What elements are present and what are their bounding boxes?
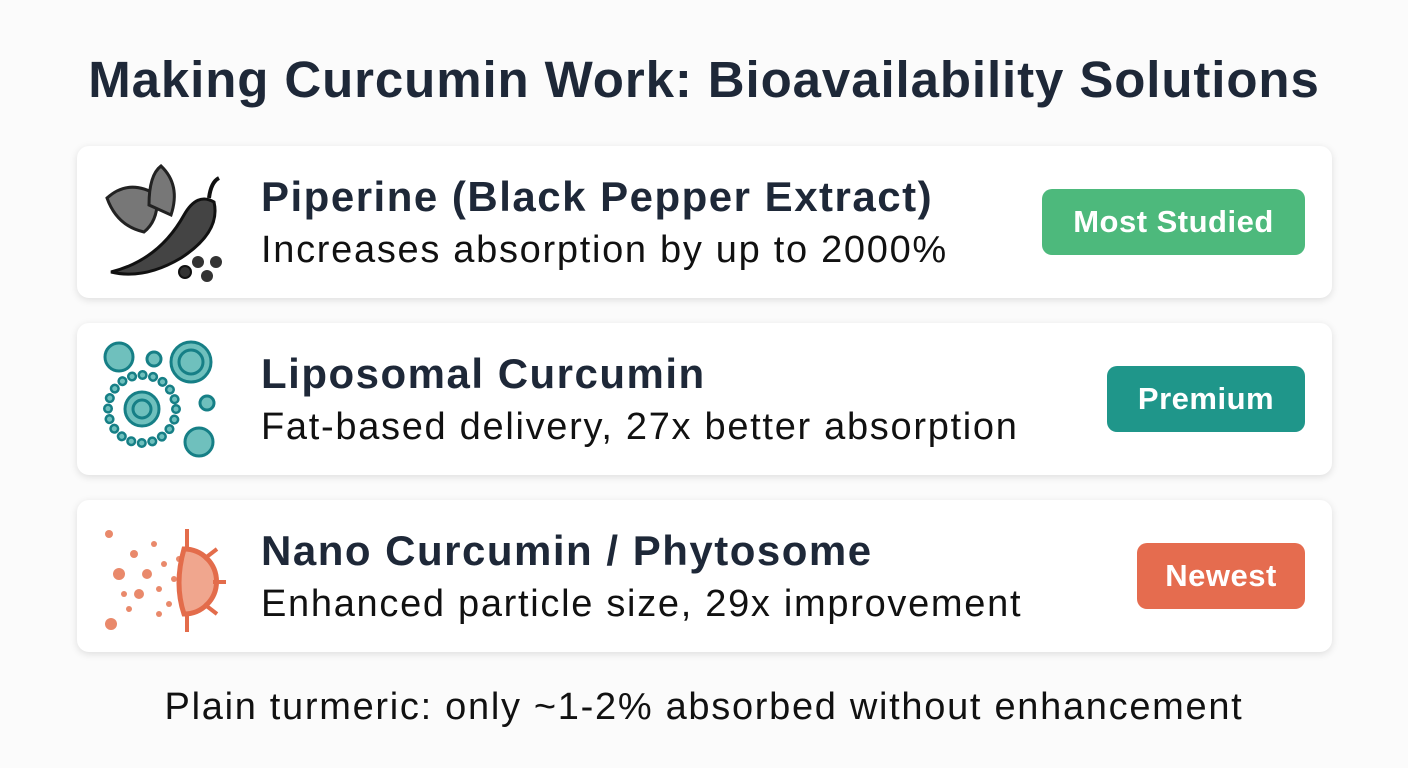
panel: piperine [77, 146, 1332, 298]
icon: nano particles [105, 529, 226, 632]
panel: nano [77, 500, 1332, 652]
badge: Premium [1138, 381, 1274, 416]
panel: liposomal [77, 323, 1332, 475]
badge [1042, 189, 1305, 255]
badge [1137, 543, 1305, 609]
text: Enhanced particle size, 29x improvement [261, 583, 1022, 625]
icon: liposome [103, 340, 216, 458]
text: Fat-based delivery, 27x better absorption [261, 406, 1019, 448]
footer note: Plain turmeric: only ~1-2% absorbed without enhancement [165, 686, 1243, 728]
heading: Liposomal Curcumin [261, 350, 706, 397]
heading: Nano Curcumin / Phytosome [261, 527, 873, 574]
badge: Newest [1165, 558, 1277, 593]
text: Increases absorption by up to 2000% [261, 229, 948, 271]
badge [1107, 366, 1305, 432]
heading: Piperine (Black Pepper Extract) [261, 173, 933, 220]
icon: pepper [105, 164, 222, 282]
badge: Most Studied [1073, 204, 1274, 239]
title: Making Curcumin Work: Bioavailability Solutions [88, 51, 1320, 108]
